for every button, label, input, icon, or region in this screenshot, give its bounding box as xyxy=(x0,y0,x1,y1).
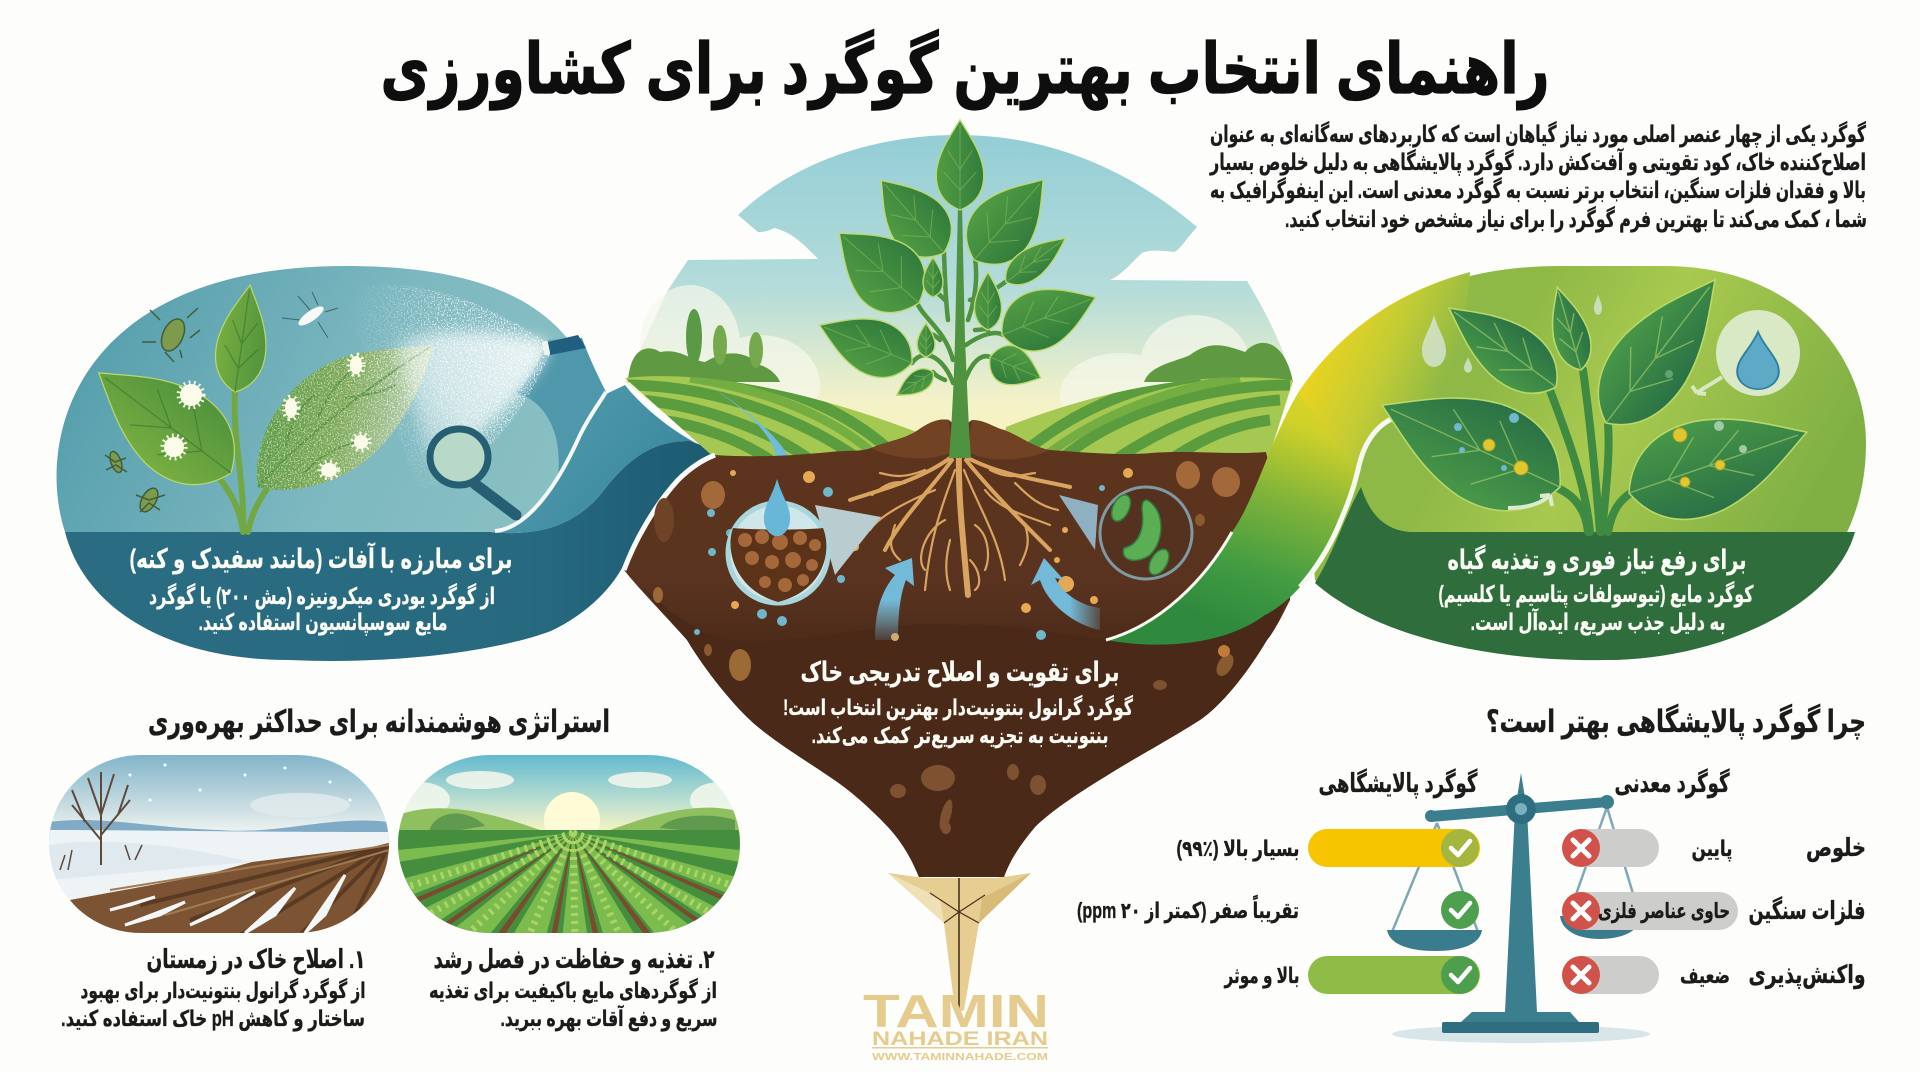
main stem xyxy=(949,205,971,458)
plant stems xyxy=(205,390,280,532)
leaf: left xyxy=(72,337,258,508)
row: purity xyxy=(1176,829,1866,867)
insects xyxy=(105,308,200,515)
body: soil: گوگرد گرانول بنتونیت‌دار بهترین انتخاب است! xyxy=(783,694,1133,721)
row: purity: بسیار بالا (٪۹۹) xyxy=(1176,836,1300,861)
right field xyxy=(1005,377,1293,458)
soil darker lower layer xyxy=(640,585,1285,877)
leaf: top center xyxy=(1540,282,1598,375)
bushes right xyxy=(1144,343,1293,382)
arrow: drop to leaf xyxy=(1692,377,1722,394)
ribbon inner white line xyxy=(1300,417,1396,587)
panel background light xyxy=(57,266,606,532)
icon: water drop on lens xyxy=(764,479,790,536)
row: purity: پایین xyxy=(1692,836,1732,862)
sky dome xyxy=(625,135,1293,455)
leaf: upper right xyxy=(950,159,1067,281)
row: heavy metals xyxy=(1077,891,1866,930)
logo mark xyxy=(888,873,1031,1012)
panel mid teal zone xyxy=(515,338,606,487)
leaf: small lower inner xyxy=(917,323,935,357)
leaf: small mid left xyxy=(923,257,943,297)
step 2 text: ۲. تغذیه و حفاظت در فصل رشد xyxy=(434,944,715,975)
left field xyxy=(625,376,916,456)
panel background xyxy=(1298,266,1866,660)
plant stems xyxy=(1548,370,1632,532)
leaf: top center xyxy=(936,120,984,210)
leaf: right xyxy=(1614,387,1822,538)
icon: sprayer nozzle xyxy=(542,335,586,355)
row: reactivity: ضعیف xyxy=(1680,963,1730,988)
leaf: left xyxy=(1360,358,1582,534)
faint droplets xyxy=(1422,294,1602,373)
scale chains xyxy=(1392,807,1640,932)
leaf: small right xyxy=(997,226,1074,294)
step 1 text: از گوگرد گرانول بنتونیت‌دار برای بهبود xyxy=(80,977,366,1004)
logo subtitle: NAHADE IRAN xyxy=(872,1029,1048,1050)
heading: pests: برای مبارزه با آفات (مانند سفیدک و کنه) xyxy=(130,542,512,575)
soil sample cone xyxy=(815,505,881,575)
body: soil xyxy=(783,694,1133,749)
soil pebbles and mineral dots xyxy=(653,461,1240,834)
body: nutrition xyxy=(1438,581,1754,636)
white separator xyxy=(495,392,606,531)
white fly xyxy=(282,292,338,338)
ribbon upper blend xyxy=(1298,272,1470,470)
logo: Tamin Nahade Iran xyxy=(863,873,1049,1063)
ribbon mid teal xyxy=(490,385,717,533)
logo url: WWW.TAMINNAHADE.COM xyxy=(872,1052,1048,1063)
intro text block xyxy=(1209,121,1867,233)
roots xyxy=(850,455,1070,595)
column headings xyxy=(1318,768,1730,799)
row: reactivity xyxy=(1224,956,1866,994)
ribbon yellow to green xyxy=(1106,277,1453,645)
column headings: گوگرد معدنی xyxy=(1614,768,1730,799)
body: nutrition: به دلیل جذب سریع، ایده‌آل است. xyxy=(1470,607,1726,636)
body: pests xyxy=(149,583,495,636)
leaf: middle left xyxy=(816,206,942,330)
trees and bushes left xyxy=(628,309,780,382)
pest marks on leaves xyxy=(164,356,368,477)
soil sample lens xyxy=(728,503,828,603)
body: soil: بنتونیت به تجزیه سریع‌تر کمک می‌کند. xyxy=(812,723,1108,749)
spray cone xyxy=(395,331,548,462)
scale pans xyxy=(1387,930,1482,951)
soil mound highlights xyxy=(871,419,1050,459)
row: purity: خلوص xyxy=(1806,834,1866,863)
heading: soil: برای تقویت و اصلاح تدریجی خاک xyxy=(800,657,1120,688)
title: راهنمای انتخاب بهترین گوگرد برای کشاورزی xyxy=(380,29,1550,110)
heading: strategy: استراتژی هوشمندانه برای حداکثر بهره‌وری xyxy=(148,704,610,740)
panel: pest control (left) xyxy=(57,266,720,661)
leaf: top right xyxy=(1575,256,1746,447)
body: pests: مایع سوسپانسیون استفاده کنید. xyxy=(198,609,448,636)
panel: immediate nutrition (right) xyxy=(1106,256,1866,660)
row: heavy metals: فلزات سنگین xyxy=(1748,896,1866,926)
leaf: lower left xyxy=(809,300,922,389)
spray specks xyxy=(340,285,550,490)
row: heavy metals: تقریباً صفر (کمتر از ۲۰ ppm) xyxy=(1077,894,1299,924)
scale post and beam xyxy=(1505,773,1537,1012)
body: pests: از گوگرد یودری میکرونیزه (مش ۲۰۰) یا گوگرد xyxy=(149,583,495,610)
ribbon edge highlight xyxy=(1106,532,1232,640)
leaf: upper left xyxy=(859,161,966,272)
leaf: middle right xyxy=(991,270,1107,362)
image: summer field xyxy=(390,755,750,940)
arrow: right curved xyxy=(1031,558,1100,630)
microbe lens xyxy=(1100,487,1192,579)
pale clouds xyxy=(640,285,1250,437)
dark ribbon and text band xyxy=(65,441,720,661)
plant stems xyxy=(912,253,1008,383)
image: winter field xyxy=(49,755,389,940)
logo name: TAMIN xyxy=(863,985,1049,1037)
water stream xyxy=(706,384,788,456)
step 1 text: ۱. اصلاح خاک در زمستان xyxy=(147,944,366,974)
soil body xyxy=(624,419,1292,877)
leaf: small lower left xyxy=(891,363,939,404)
scale base shadow xyxy=(1392,1025,1650,1043)
panel: plant and soil (center) xyxy=(620,120,1300,877)
icon: magnifying glass xyxy=(430,429,516,515)
leaf: top xyxy=(210,282,275,395)
step 2 text xyxy=(429,944,718,1032)
microbe lens cone xyxy=(1059,495,1098,550)
heading: nutrition: برای رفع نیاز فوری و تغذیه گیاه xyxy=(1448,544,1746,576)
leaf: lower right xyxy=(983,339,1048,396)
soil left white edge xyxy=(624,455,715,570)
arrow: leaf lower xyxy=(1508,495,1552,508)
leaf: small mid right xyxy=(975,272,1001,330)
column headings: گوگرد پالایشگاهی xyxy=(1318,768,1478,799)
leaf: top left xyxy=(1431,284,1573,411)
row: reactivity: بالا و موثر xyxy=(1224,963,1300,989)
step 2 text: از گوگردهای مایع باکیفیت برای تغذیه xyxy=(429,977,717,1004)
body: nutrition: کوگرد مایع (تیوسولفات پتاسیم یا کلسیم) xyxy=(1438,581,1754,608)
row: heavy metals: حاوی عناصر فلزی xyxy=(1598,900,1730,923)
icon: water drop badge xyxy=(1716,310,1800,396)
nutrient dots xyxy=(1454,370,1747,487)
arrow: left upward xyxy=(875,558,914,640)
dark text band xyxy=(1315,487,1855,660)
comparison scale graphic xyxy=(1387,773,1650,1043)
step 1 text xyxy=(61,944,365,1032)
leaf: frosted large xyxy=(257,345,434,490)
row: reactivity: واکنش‌پذیری xyxy=(1748,961,1866,990)
step 1 text: ساختار و کاهش pH خاک استفاده کنید. xyxy=(61,1006,365,1032)
step 2 text: سریع و دفع آقات بهره ببرید. xyxy=(500,1004,718,1032)
